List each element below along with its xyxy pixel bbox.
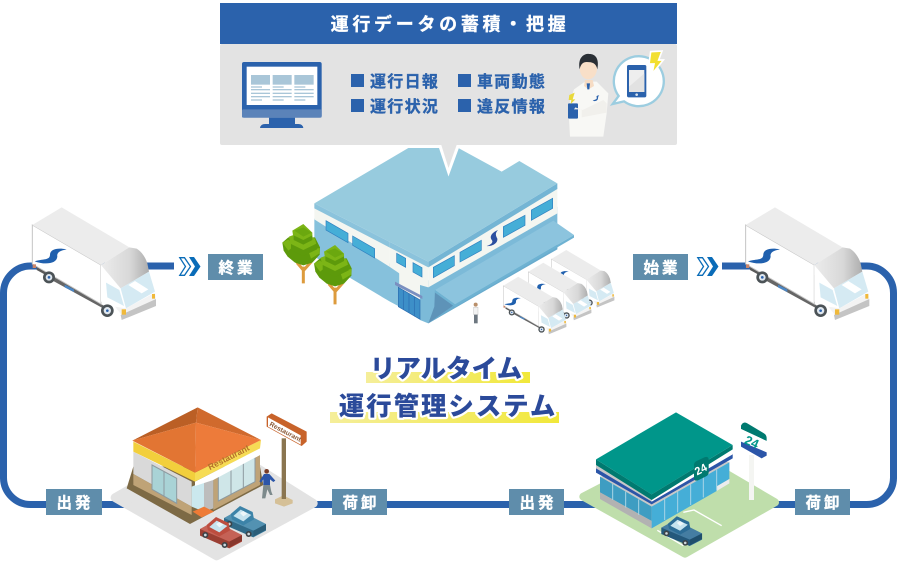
icon: smartphone speech bubble — [613, 51, 664, 106]
blue car — [224, 506, 266, 537]
data list: 運行状況 — [370, 98, 439, 116]
small truck back — [551, 250, 614, 308]
label: 荷卸 left — [332, 489, 387, 515]
parked car — [661, 516, 702, 546]
red car — [200, 517, 242, 548]
data list: 違反情報 — [477, 97, 546, 116]
staff figure — [474, 303, 478, 323]
parking lines — [657, 510, 722, 546]
illustration: logistics centre — [314, 148, 574, 323]
panel heading: 運行データの蓄積・把握 — [331, 14, 569, 34]
store ground — [583, 447, 775, 554]
store building: 24 — [693, 461, 710, 478]
label: 出発 right — [509, 489, 564, 515]
illustration: convenience store — [583, 412, 775, 554]
tree left — [282, 224, 320, 283]
panel heading — [220, 3, 677, 44]
label: 荷卸 left: 荷卸 — [342, 494, 380, 512]
small truck middle — [528, 263, 591, 320]
illustration: restaurant — [115, 407, 313, 556]
panel: data storage — [220, 3, 677, 145]
label: 出発 right: 出発 — [519, 494, 557, 512]
restaurant ground — [115, 441, 313, 556]
pedestrian — [259, 469, 275, 498]
panel pointer — [438, 144, 460, 176]
restaurant building — [127, 407, 263, 524]
arrow: start of work — [698, 257, 718, 276]
restaurant sign: Restaurant — [268, 421, 303, 444]
label: 荷卸 right — [795, 489, 850, 515]
label: 出発 left: 出発 — [56, 494, 94, 512]
data list: 車両動態 — [477, 72, 546, 91]
label: 始業 — [633, 254, 688, 280]
label: 出発 left — [46, 489, 102, 515]
warehouse building — [314, 148, 574, 323]
small truck front — [503, 277, 566, 334]
arrow: end of work — [180, 257, 200, 276]
store building — [596, 412, 733, 528]
route line — [3, 266, 894, 505]
title: リアルタイム — [370, 356, 522, 384]
data list — [351, 72, 546, 116]
restaurant building: Restaurant — [206, 443, 251, 472]
restaurant sign — [267, 413, 307, 507]
tree right — [314, 245, 352, 304]
title: 運行管理システム — [339, 392, 557, 421]
label: 始業: 始業 — [643, 259, 681, 277]
icon: staff member — [568, 54, 608, 137]
panel body — [220, 44, 677, 145]
data list: 運行日報 — [370, 73, 439, 91]
icon: monitor — [242, 62, 322, 128]
label: 荷卸 right: 荷卸 — [805, 494, 843, 512]
label: 終業 — [208, 254, 263, 280]
truck: end of work — [32, 207, 156, 320]
store sign: 24 — [742, 433, 761, 452]
store sign — [741, 423, 767, 500]
title — [330, 356, 559, 423]
truck: start of work — [746, 207, 869, 320]
label: 終業: 終業 — [218, 259, 256, 277]
